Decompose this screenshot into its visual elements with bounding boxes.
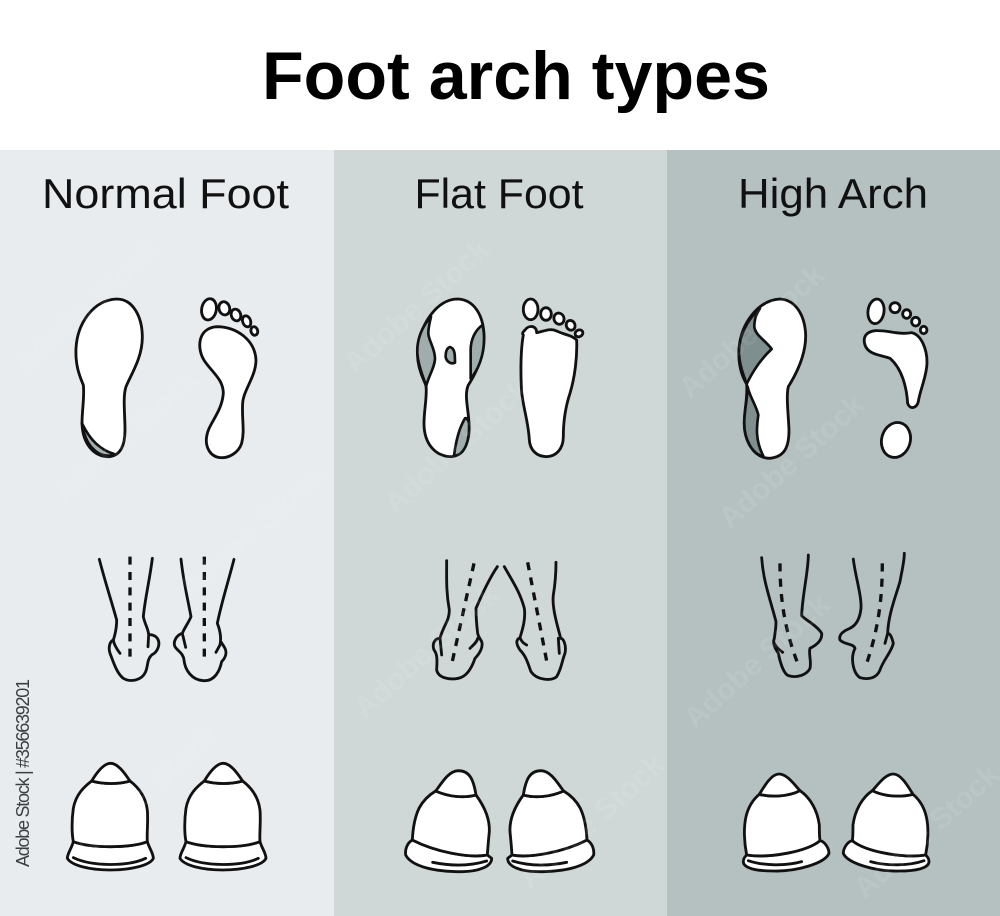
watermark: stock image text: Adobe Stock: [68, 718, 226, 865]
icon: flat feet from behind: [433, 561, 565, 679]
heading: high arch: High Arch: [738, 170, 928, 217]
icon: high arch shoes from behind: [743, 774, 929, 871]
icon: flat foot insole: [417, 299, 484, 457]
panel: normal foot: [0, 150, 334, 916]
watermark: stock image text: Adobe Stock: [348, 578, 506, 725]
watermark: stock image text: Adobe Stock: [513, 748, 671, 895]
icon: flat footprint: [521, 299, 584, 457]
icon: high arch feet from behind: [762, 553, 904, 679]
watermark: stock image text: Adobe Stock: [713, 388, 871, 535]
watermark: stock image text: Adobe Stock: [173, 458, 331, 605]
heading: flat foot: Flat Foot: [414, 170, 584, 217]
icon: normal foot insole: [76, 299, 142, 457]
stock id caption: Adobe Stock | #356639201: [13, 679, 33, 867]
panel: flat foot: [334, 150, 667, 916]
watermark: stock image text: Adobe Stock: [678, 588, 836, 735]
watermark: stock image text: Adobe Stock: [8, 233, 166, 380]
title: Foot arch types: [262, 38, 770, 114]
icon: flat-foot shoes from behind: [406, 771, 594, 872]
watermark: stock image text: Adobe Stock: [48, 363, 206, 510]
watermark: stock image text: Adobe Stock: [673, 258, 831, 405]
icon: normal shoes from behind: [67, 763, 266, 870]
panel: high arch: [667, 150, 1000, 916]
icon: high arch footprint: [864, 298, 927, 461]
icon: normal feet from behind: [99, 557, 234, 681]
watermark: stock image text: Adobe Stock: [378, 373, 536, 520]
watermark: stock image text: Adobe Stock: [338, 233, 496, 380]
heading: normal foot: Normal Foot: [42, 170, 289, 217]
icon: high arch insole: [739, 299, 806, 458]
watermark: stock image text: [8, 233, 1000, 905]
icon: normal footprint: [200, 298, 259, 458]
